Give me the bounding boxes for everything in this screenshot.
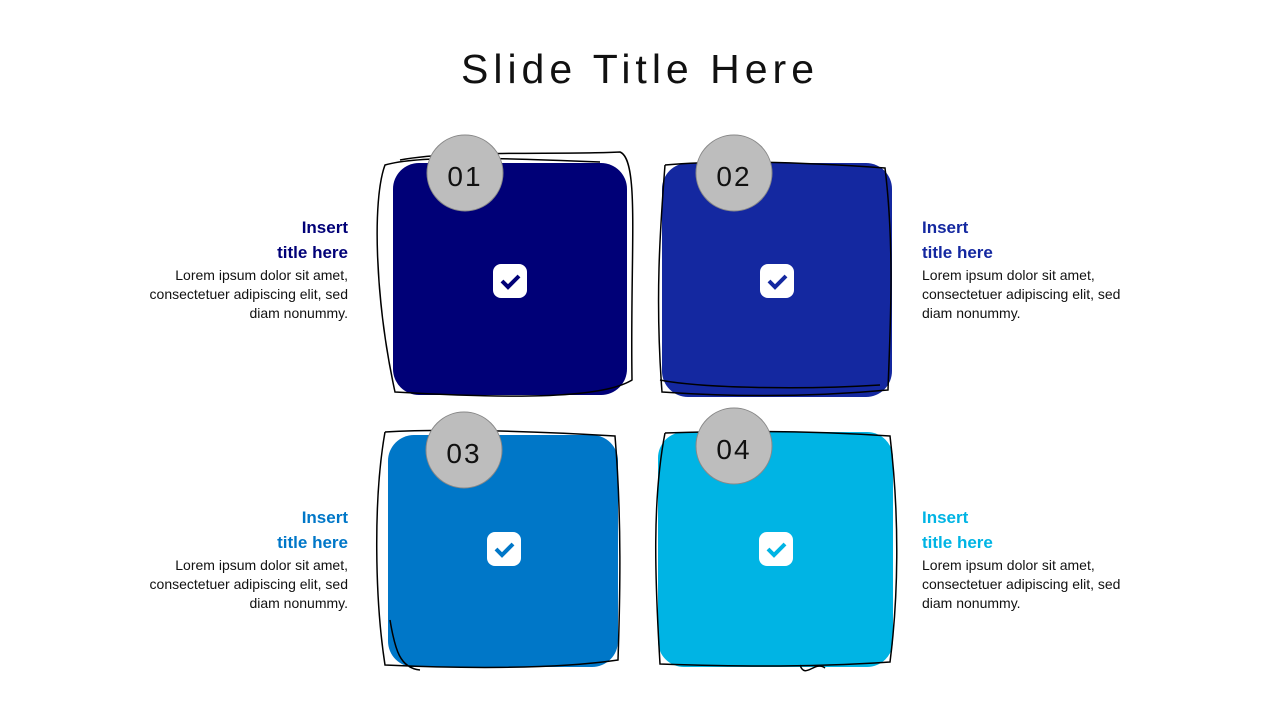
text block 01: title here	[277, 243, 348, 262]
text block 04: Insert	[922, 508, 968, 527]
text block 02: Lorem ipsum dolor sit amet, consectetuer adipiscing elit, sed diam nonummy.	[922, 267, 1120, 321]
title: Slide Title Here	[461, 46, 819, 92]
text block 03: Lorem ipsum dolor sit amet, consectetuer adipiscing elit, sed diam nonummy.	[150, 557, 348, 611]
text block 01	[150, 218, 348, 321]
badge 01	[427, 135, 503, 211]
square 04	[656, 432, 897, 671]
badge 03	[426, 412, 502, 488]
text block 02: title here	[922, 243, 993, 262]
text block 04: title here	[922, 533, 993, 552]
badge 01: 01	[447, 161, 483, 192]
badge 03: 03	[446, 438, 482, 469]
badge 02: 02	[716, 161, 752, 192]
badge 04	[696, 408, 772, 484]
icon: check 01	[493, 264, 527, 298]
text block 03: Insert	[302, 508, 348, 527]
text block 02: Insert	[922, 218, 968, 237]
text block 04	[922, 508, 1120, 611]
square 02	[659, 162, 892, 397]
text block 02	[922, 218, 1120, 321]
square 03	[377, 430, 620, 670]
text block 01: Lorem ipsum dolor sit amet, consectetuer adipiscing elit, sed diam nonummy.	[150, 267, 348, 321]
text block 01: Insert	[302, 218, 348, 237]
square 01	[377, 152, 633, 396]
badge 02	[696, 135, 772, 211]
text block 03	[150, 508, 348, 611]
text block 03: title here	[277, 533, 348, 552]
icon: check 04	[759, 532, 793, 566]
icon: check 02	[760, 264, 794, 298]
badge 04: 04	[716, 434, 752, 465]
icon: check 03	[487, 532, 521, 566]
text block 04: Lorem ipsum dolor sit amet, consectetuer adipiscing elit, sed diam nonummy.	[922, 557, 1120, 611]
